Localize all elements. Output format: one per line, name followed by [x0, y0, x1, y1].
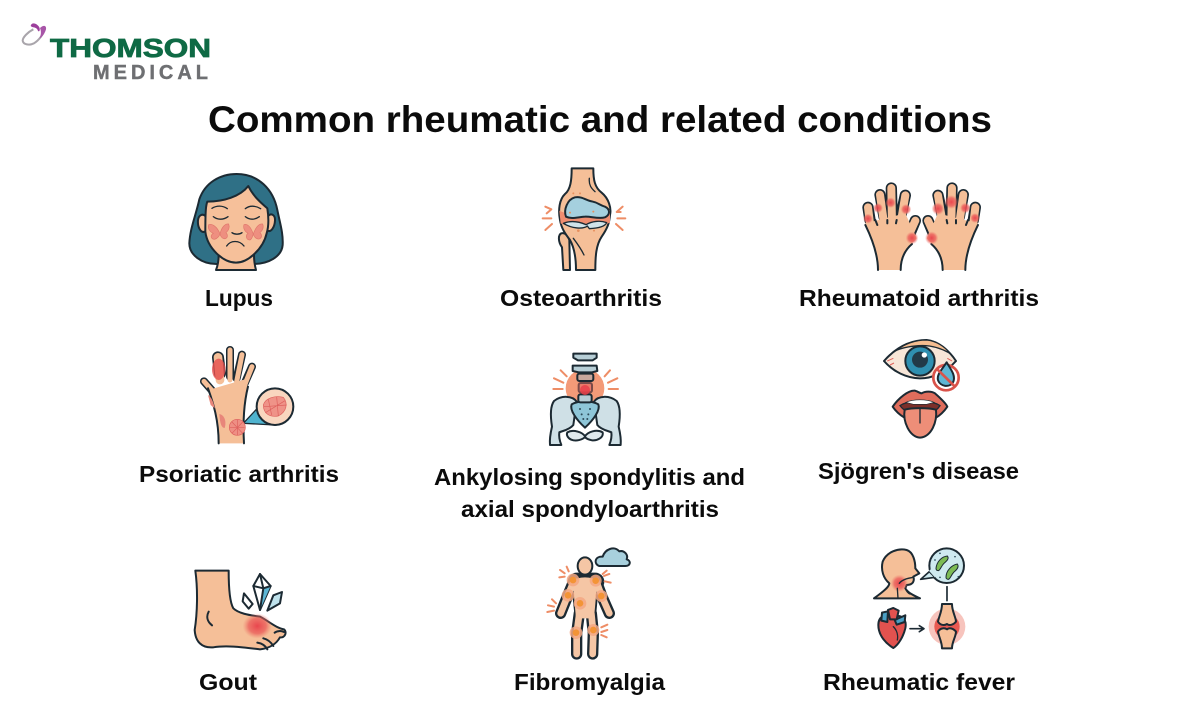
brand name: THOMSON: [50, 33, 211, 63]
label: Osteoarthritis: [500, 285, 662, 311]
icon: hand with plaques and magnifier: [204, 350, 293, 443]
icon: dry eye and tongue: [884, 340, 959, 438]
title: Common rheumatic and related conditions: [208, 99, 992, 140]
label: Fibromyalgia: [514, 669, 665, 695]
panel: fibromyalgia: [514, 548, 665, 695]
icon: spine and pelvis: [550, 354, 621, 445]
label: Rheumatoid arthritis: [799, 285, 1039, 311]
icon: face with butterfly rash: [189, 174, 283, 270]
icon: throat, bacteria, heart, joint: [874, 548, 965, 648]
panel: osteoarthritis: [500, 168, 662, 311]
icon: heart logo: [23, 23, 46, 45]
panel: rheumatoid arthritis: [799, 188, 1039, 311]
label: Sjögren's disease: [818, 458, 1019, 484]
label: Gout: [199, 669, 257, 695]
panel: ankylosing spondylitis: [434, 354, 745, 522]
label: Rheumatic fever: [823, 669, 1015, 695]
icon: hands with swollen joints: [863, 188, 980, 270]
label: axial spondyloarthritis: [461, 496, 719, 522]
label: [434, 464, 745, 522]
panel: gout: [195, 571, 286, 695]
rash left: [208, 224, 229, 239]
panel: sjogren's disease: [818, 340, 1019, 484]
icon: body with pain points and cloud: [547, 548, 630, 654]
panel: rheumatic fever: [823, 548, 1015, 695]
rash right: [244, 224, 263, 240]
label: Lupus: [205, 285, 273, 311]
panel: lupus: [189, 174, 283, 311]
icon: knee joint: [543, 168, 625, 270]
brand subtitle: MEDICAL: [93, 62, 208, 84]
logo: Thomson Medical: [23, 23, 211, 84]
label: Ankylosing spondylitis and: [434, 464, 745, 490]
icon: foot with crystals: [195, 571, 286, 649]
panel: psoriatic arthritis: [139, 350, 339, 487]
label: Psoriatic arthritis: [139, 461, 339, 487]
